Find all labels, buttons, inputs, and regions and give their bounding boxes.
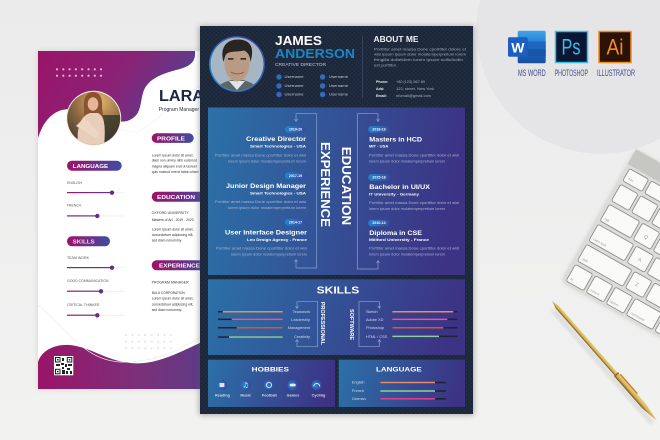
social links: Username: [329, 93, 348, 97]
about me text: wisi ipsum ipsum dolor molatemperpretium lorem: [374, 52, 466, 56]
slider: team work: TEAM WORK: [67, 256, 90, 260]
slider: french: FRENCH: [67, 204, 82, 208]
decorative dots top: [56, 68, 102, 77]
portrait: man: [209, 36, 265, 92]
language labels: French: [352, 389, 364, 393]
job title: Program Manager: [159, 107, 199, 113]
about me text: fringilla dotteldem lorem ipsum sollicitudin: [374, 58, 463, 62]
education entry: consectetuer adipiscing elit,: [152, 233, 193, 237]
education entry: Lorem ipsum dolor sit amet,: [152, 228, 194, 232]
about me heading: ABOUT ME: [374, 35, 419, 44]
experience entry 1: Smart Technologies - USA: [250, 145, 306, 149]
language labels: English: [352, 381, 364, 385]
panel: hobbies: [208, 360, 335, 407]
back resume: magenta template: [38, 51, 212, 389]
hobby labels: [215, 393, 326, 397]
contact details: [376, 80, 434, 98]
professional skill labels: Teamwork: [293, 310, 310, 314]
name: JAMES: [275, 33, 322, 48]
slider: english: ENGLISH: [67, 181, 83, 185]
software skill labels: Sketch: [366, 310, 378, 314]
social links: Username: [329, 75, 348, 79]
icon: Photoshop: Ps: [562, 34, 580, 59]
software skill labels: [366, 310, 388, 339]
experience entry: consectetuer adipiscing elit,: [152, 302, 193, 306]
software label: SOFTWARE: [348, 309, 354, 341]
keyboard: caps lock: [592, 237, 607, 248]
icon: music: ♫: [243, 382, 249, 390]
slider: english: [67, 181, 124, 195]
experience entry: Lorem ipsum dolor sit amet,: [152, 296, 194, 300]
professional bracket: [296, 302, 318, 347]
name: ANDERSON: [275, 46, 355, 61]
contact details: Add:: [376, 87, 384, 91]
software skill labels: Adobe XD: [366, 318, 384, 322]
slider: team work: [67, 256, 124, 270]
contact details: 123, street, New York: [396, 87, 434, 91]
professional skill labels: Creativity: [294, 335, 310, 339]
education entry 1: Masters in HCD: [369, 136, 423, 143]
education entry: Masters of Art - 2019 - 2020: [152, 218, 194, 222]
keyboard: esc: [628, 177, 635, 183]
portrait: woman: [66, 90, 124, 147]
experience entry 2: Porttitor amet massa Done cporttitor dolor et wisl: [215, 200, 306, 204]
slider: good communication: [67, 279, 124, 293]
name: [275, 33, 355, 61]
pill: skills: [67, 236, 110, 246]
experience entry 3: User Interface Designer: [225, 229, 308, 236]
skills heading: SKILLS: [317, 285, 359, 297]
education entry 3: [368, 220, 459, 256]
language bars: [380, 382, 446, 400]
footer wave: [38, 342, 202, 389]
professional skill labels: Management: [288, 326, 311, 330]
header wave: [38, 51, 195, 138]
education entry 3: 2010-14: [372, 221, 386, 225]
hobby labels: Games: [287, 393, 299, 397]
keyboard: [561, 149, 660, 400]
experience entry: BULA CORPORATION: [152, 291, 185, 295]
education entry: sed diam nonummy.: [152, 238, 182, 242]
education entry 3: Porttitor amet massa Done cporttitor dolor et wisl: [369, 246, 459, 250]
experience heading: EXPERIENCE: [318, 142, 333, 227]
language labels: [352, 381, 366, 401]
decorative dots bottom: [125, 334, 172, 349]
about me text: [374, 48, 466, 68]
education entry 1: Porttitor amet massa Done cporttitor dolor et wisl: [369, 154, 459, 158]
name: LARA: [159, 88, 204, 105]
about me text: Porttitor amet massa Done cporttitor dolore et: [374, 48, 466, 52]
pill: education: EDUCATION: [157, 195, 195, 201]
education entry 1: [368, 126, 459, 164]
education heading: EDUCATION: [339, 147, 354, 225]
social links: Username: [284, 84, 304, 88]
icon: cycling: [312, 380, 322, 390]
experience entry: [152, 280, 194, 312]
experience entry 2: [215, 172, 307, 210]
experience entry 3: Porttitor amet massa Done cporttitor dolor et wisl: [216, 246, 307, 250]
hobby labels: Music: [240, 393, 251, 397]
icon: MS Word: W: [511, 40, 525, 56]
education entry: [152, 211, 194, 242]
experience entry: sed diam nonummy.: [152, 308, 182, 312]
experience entry 3: lorem ipsum dolor molatemperpretium lorem: [231, 252, 307, 256]
education entry 1: 2018-19: [372, 128, 386, 132]
keyboard: fn: [570, 277, 574, 282]
keyboard: command: [630, 311, 645, 322]
experience entry: PROGRAM MANAGER: [152, 280, 189, 284]
icon: Illustrator: Ai: [606, 34, 624, 59]
pill: profile: PROFILE: [157, 136, 186, 142]
education entry 1: lorem ipsum dolor molatemperpretium lorem: [369, 160, 445, 164]
experience entry 1: lorem ipsum dolor molatemperpretium lorem: [228, 160, 306, 164]
education bracket: [357, 114, 380, 269]
keyboard: control: [589, 288, 600, 297]
pill: language: LANGUAGE: [73, 164, 109, 170]
experience entry 2: Junior Design Manager: [226, 183, 307, 190]
hobby labels: Football: [262, 393, 277, 397]
education entry 3: lorem ipsum dolor molatemperpretium lorem: [369, 252, 445, 256]
label: MS Word: MS WORD: [518, 68, 546, 78]
experience entry 1: 2019-20: [289, 128, 302, 132]
education entry 2: lorem ipsum dolor molatemperpretium lorem: [369, 207, 445, 211]
contact details: nfomail@gmail.com: [396, 94, 431, 98]
icon: games: [288, 380, 298, 390]
about me text: est porttitor.: [374, 64, 397, 68]
keyboard: A: [636, 257, 643, 264]
icon: football: [264, 380, 274, 390]
pill: education: [152, 192, 200, 202]
education entry 1: MIT - USA: [369, 145, 389, 149]
experience entry 1: Creative Director: [246, 136, 307, 143]
professional label: PROFESSIONAL: [319, 302, 325, 345]
contact details: Phone:: [376, 80, 388, 84]
QR code: [54, 356, 73, 375]
keyboard: shift: [581, 257, 589, 264]
panel: experience and education: [208, 108, 465, 275]
hobby labels: Cycling: [312, 393, 326, 397]
language heading: LANGUAGE: [376, 367, 422, 374]
experience bracket: [294, 114, 317, 268]
professional skill labels: Leadership: [291, 318, 310, 322]
experience entry 1: [215, 126, 307, 164]
role: CREATIVE DIRECTOR: [275, 62, 326, 67]
experience entry 2: Smart Technologies - USA: [250, 191, 306, 195]
profile text: magna aliquam erat ut laoreet: [152, 165, 197, 169]
social links: Username: [329, 84, 348, 88]
keyboard: Z: [634, 282, 639, 289]
slider: critical thinker: CRITICAL THINKER: [67, 303, 100, 307]
profile text: diam non ummy nibh euismod: [152, 159, 197, 163]
contact details: +80 (123) 567 89: [396, 80, 425, 84]
slider: critical thinker: [67, 303, 124, 317]
keyboard: option: [609, 299, 619, 307]
software skill labels: HTML / CSS: [366, 335, 388, 339]
social links: [276, 74, 348, 97]
education entry 3: Millford University - France: [369, 238, 429, 242]
professional skill labels: [288, 310, 311, 339]
experience entry 3: Leo Design Agency - France: [247, 238, 307, 242]
profile text: Lorem ipsum dolor sit amet,: [152, 153, 194, 157]
education entry 2: [368, 174, 459, 211]
experience entry 2: lorem ipsum dolor molatemperpretium lorem: [228, 206, 306, 210]
software skill bars: [392, 311, 457, 337]
language labels: German: [352, 397, 366, 401]
education entry 2: Porttitor amet massa Done cporttitor dolor et wisl: [369, 201, 459, 205]
icon: Photoshop: [555, 32, 588, 78]
front resume: dark template: [199, 26, 474, 415]
icon: reading: [217, 380, 227, 390]
keyboard: tab: [604, 217, 610, 223]
pill: skills: SKILLS: [73, 240, 95, 246]
education entry 2: IT University - Germany: [369, 193, 420, 197]
experience entry 3: 2014-17: [289, 220, 302, 224]
software skill labels: Photoshop: [366, 326, 384, 330]
profile text: quis nostrud exerci tation ullam: [152, 170, 199, 174]
pen: [547, 298, 660, 425]
label: Photoshop: PHOTOSHOP: [555, 68, 588, 78]
contact details: Email:: [376, 94, 387, 98]
education entry 2: 2015-18: [372, 176, 386, 180]
icon: Illustrator: [597, 32, 635, 78]
education entry 3: Diploma in CSE: [369, 230, 422, 237]
pill: profile: [152, 133, 194, 143]
experience entry 1: Porttitor amet massa Done cporttitor dolor et wisl: [215, 154, 306, 158]
profile text: [152, 153, 199, 174]
icon: MS Word: [508, 31, 546, 78]
experience entry 2: 2017-19: [289, 174, 302, 178]
professional skill bars: [218, 311, 283, 338]
label: Illustrator: ILLUSTRATOR: [597, 68, 635, 78]
pill: experience: [152, 260, 200, 270]
hobby labels: Reading: [215, 393, 231, 397]
pill: experience: EXPERIENCE: [159, 264, 201, 270]
slider: french: [67, 204, 124, 218]
social links: Username: [284, 93, 304, 97]
panel: skills: [208, 279, 465, 355]
experience entry 3: [216, 219, 308, 256]
panel: language: [339, 360, 465, 407]
hobbies heading: HOBBIES: [252, 367, 290, 374]
education entry: OXFORD UNIVERSITY: [152, 211, 189, 215]
software bracket: [359, 302, 381, 347]
social links: Username: [284, 75, 304, 79]
pill: language: [67, 161, 122, 171]
keyboard: Q: [643, 234, 649, 241]
slider: good communication: GOOD COMMUNICATION: [67, 279, 109, 283]
education entry 2: Bachelor in UI/UX: [369, 184, 431, 191]
